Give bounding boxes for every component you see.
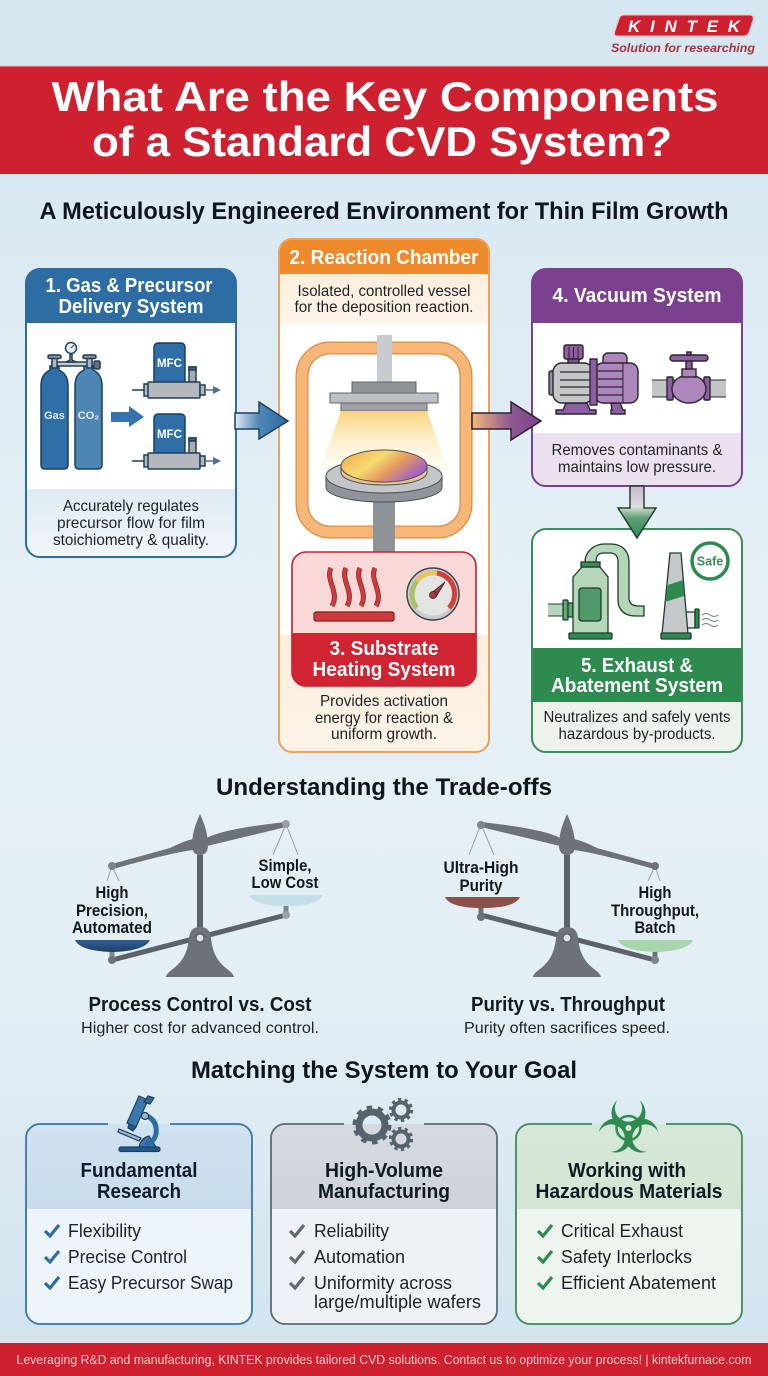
logo: KINTEK: KINTEK <box>628 17 742 36</box>
scale label: high throughput: Batch <box>634 919 676 937</box>
card 1 checklist: Flexibility <box>68 1221 141 1241</box>
card 3 checklist <box>538 1221 716 1293</box>
panel 5 caption: hazardous by-products. <box>558 726 716 743</box>
balance scale: purity vs throughput <box>444 814 699 977</box>
icon: mass flow controller 2: MFC <box>157 429 182 441</box>
icon: heat waves and hot plate <box>314 568 394 621</box>
trade-off text: process control vs cost <box>81 993 319 1037</box>
card 2 checklist <box>290 1221 481 1312</box>
icon: gas cylinders: CO₂ <box>78 410 99 422</box>
scale label: high precision: Precision, <box>76 902 148 920</box>
card 1 heading: Fundamental <box>80 1159 198 1182</box>
heading: trade-offs: Understanding the Trade-offs <box>216 774 552 801</box>
title banner: What Are the Key Components <box>52 73 718 120</box>
card: hazardous materials <box>516 1100 742 1324</box>
card 1 heading <box>80 1159 198 1203</box>
icon: safe badge <box>692 543 728 579</box>
card: high-volume manufacturing <box>271 1100 497 1324</box>
scale label: ultra-high purity: Purity <box>460 877 503 895</box>
panel 3 heading: 3. Substrate <box>330 637 438 660</box>
panel 5 heading <box>551 654 723 697</box>
trade-off text: purity vs throughput: Purity vs. Throughput <box>471 993 665 1016</box>
icon: chimney stack <box>661 553 718 639</box>
logo: KINTEK: Solution for researching <box>611 43 755 55</box>
trade-off text: purity vs throughput: Purity often sacrifices speed. <box>464 1020 670 1037</box>
panel: vacuum system <box>532 269 742 486</box>
card 2 heading: Manufacturing <box>318 1180 450 1203</box>
arrow: chamber to vacuum <box>472 402 541 440</box>
scale label: ultra-high purity: Ultra-High <box>444 859 518 877</box>
title banner: of a Standard CVD System? <box>92 118 672 165</box>
panel 1 caption: precursor flow for film <box>57 515 205 532</box>
panel 1 caption <box>53 498 209 549</box>
icon: scrubber <box>548 544 644 639</box>
card 2 checklist: large/multiple wafers <box>314 1292 481 1312</box>
panel 3 caption: Provides activation <box>320 693 448 710</box>
panel 1 heading <box>46 274 213 318</box>
card 1 heading: Research <box>97 1180 181 1203</box>
panel 4 heading: 4. Vacuum System <box>552 284 722 307</box>
scale label: low cost: Low Cost <box>252 874 319 892</box>
substrate stage and wafer <box>326 450 442 553</box>
panel: gas and precursor delivery <box>26 269 236 557</box>
panel 5 caption <box>544 709 730 743</box>
panel 3 heading <box>312 637 456 681</box>
panel 3: substrate heating <box>292 552 476 686</box>
card 2 heading <box>318 1159 450 1203</box>
panel 2 caption: Isolated, controlled vessel <box>298 283 470 300</box>
light cone <box>320 411 448 470</box>
panel 5 caption: Neutralizes and safely vents <box>544 709 730 726</box>
card 3 heading: Hazardous Materials <box>536 1180 722 1203</box>
card 3 checklist: Critical Exhaust <box>561 1221 683 1241</box>
scale label: high precision <box>72 884 152 937</box>
panel 3 caption: energy for reaction & <box>315 710 453 727</box>
trade-off text: process control vs cost: Process Control vs. Cost <box>88 993 312 1016</box>
panel 1 heading: 1. Gas & Precursor <box>46 274 213 297</box>
card 2 checklist: Uniformity across <box>314 1273 452 1293</box>
arrow: gas delivery to chamber <box>235 402 288 439</box>
card 2 checklist: Automation <box>314 1247 405 1267</box>
icon: gas cylinders <box>41 342 102 469</box>
card: fundamental research <box>26 1096 252 1324</box>
arrow: cylinders to MFC <box>111 406 144 427</box>
panel 2 heading: 2. Reaction Chamber <box>290 246 479 269</box>
chamber vessel <box>302 348 466 532</box>
panel 1 heading: Delivery System <box>58 295 204 318</box>
subtitle: A Meticulously Engineered Environment for Thin Film Growth <box>40 198 728 225</box>
balance scale: process control vs cost <box>72 814 323 977</box>
card 1 checklist <box>45 1221 233 1293</box>
panel 2 caption <box>294 283 474 316</box>
card 1 checklist: Precise Control <box>68 1247 187 1267</box>
icon: mass flow controller 2 <box>132 414 221 469</box>
card 2 heading: High-Volume <box>325 1159 443 1182</box>
scale label: high throughput <box>611 884 699 937</box>
card 3 heading: Working with <box>568 1159 686 1182</box>
title banner <box>0 65 768 174</box>
panel 2 caption: for the deposition reaction. <box>294 299 474 316</box>
logo: KINTEK <box>611 15 755 55</box>
icon: biohazard <box>596 1100 661 1157</box>
scale label: high precision: High <box>96 884 128 902</box>
arrow: vacuum to exhaust <box>618 486 656 538</box>
icon: mass flow controller 1: MFC <box>157 358 182 370</box>
panel 4 caption: maintains low pressure. <box>558 459 716 476</box>
card 3 heading <box>536 1159 722 1203</box>
panel: exhaust and abatement <box>532 529 742 752</box>
heading: matching the system: Matching the System to Your Goal <box>191 1057 577 1084</box>
icon: mass flow controller 1 <box>132 343 221 398</box>
icon: gas cylinders: Gas <box>44 410 65 422</box>
panel 3 heading: Heating System <box>312 658 456 681</box>
panel: reaction chamber <box>279 239 489 752</box>
panel 1 caption: Accurately regulates <box>63 498 199 515</box>
panel 1 caption: stoichiometry & quality. <box>53 532 209 549</box>
icon: temperature gauge <box>407 568 459 620</box>
card 3 checklist: Safety Interlocks <box>561 1247 692 1267</box>
panel 4 caption <box>552 442 723 476</box>
card 1 checklist: Easy Precursor Swap <box>68 1273 233 1293</box>
trade-off text: process control vs cost: Higher cost for advanced control. <box>81 1020 319 1037</box>
panel 5 heading: 5. Exhaust & <box>581 654 693 677</box>
scale label: high precision: Automated <box>72 919 152 937</box>
card 3 checklist: Efficient Abatement <box>561 1273 716 1293</box>
card 2 checklist: Reliability <box>314 1221 389 1241</box>
icon: safe badge: Safe <box>697 554 723 568</box>
icon: microscope <box>118 1096 160 1152</box>
scale label: low cost: Simple, <box>258 857 312 875</box>
footer banner <box>0 1343 768 1376</box>
gas showerhead <box>330 335 438 411</box>
panel 5 heading: Abatement System <box>551 674 723 697</box>
scale label: high throughput: High <box>638 884 672 902</box>
icon: vacuum valve <box>652 352 726 403</box>
icon: vacuum pump <box>549 345 638 414</box>
scale label: high throughput: Throughput, <box>611 902 699 920</box>
panel 4 caption: Removes contaminants & <box>552 442 723 459</box>
panel 3 caption <box>315 693 453 743</box>
scale label: low cost <box>252 857 319 892</box>
panel 3 caption: uniform growth. <box>331 726 437 743</box>
scale label: ultra-high purity <box>444 859 518 895</box>
trade-off text: purity vs throughput <box>464 993 670 1037</box>
footer banner: Leveraging R&D and manufacturing, KINTEK provides tailored CVD solutions. Contact us to optimize your process! | kintekfurnace.com <box>16 1353 752 1367</box>
icon: gears <box>354 1100 412 1150</box>
